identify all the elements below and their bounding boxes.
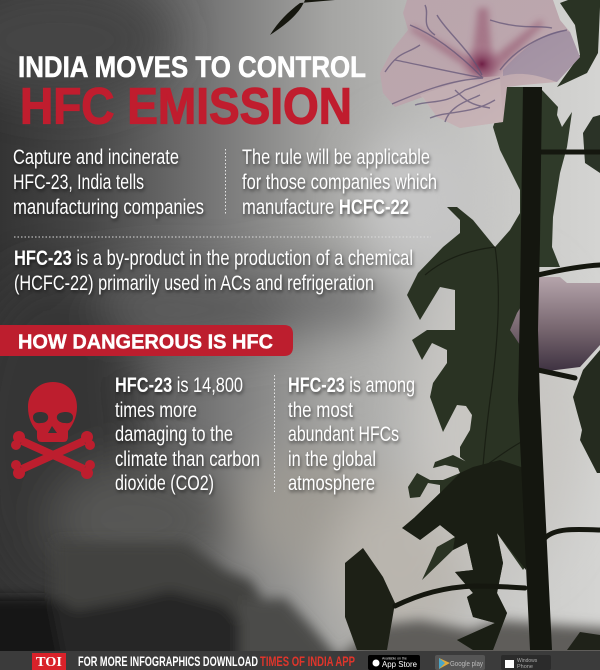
main flower — [380, 0, 580, 128]
App Store badge — [368, 655, 420, 670]
leaf veins — [420, 247, 525, 560]
text block: rule applicability — [242, 146, 437, 219]
text block: damage to the climate: dioxide (CO2) — [115, 472, 214, 495]
Windows Phone badge: Windows — [517, 658, 538, 664]
text block: HFC-23 definition: HFC-23 is a by-product in the production of a chemical — [14, 247, 413, 270]
App Store badge: Available on the — [382, 656, 407, 660]
text block: abundance in atmosphere: abundant HFCs — [288, 423, 399, 446]
TOI logo — [32, 653, 66, 670]
text block: rule applicability: The rule will be applicable — [242, 146, 430, 169]
bottom right leaf — [567, 632, 600, 650]
text block: capture and incinerate: Capture and incinerate — [13, 146, 179, 169]
title — [18, 51, 366, 134]
footer call to action: TIMES OF INDIA APP — [260, 653, 355, 669]
right lower leaf — [573, 350, 600, 473]
text block: damage to the climate — [115, 374, 260, 495]
lower flower — [510, 277, 600, 372]
divider — [274, 375, 276, 492]
text block: HFC-23 definition: (HCFC-22) primarily used in ACs and refrigeration — [14, 272, 374, 295]
text block: abundance in atmosphere: in the global — [288, 448, 376, 471]
dark lower leaf shading — [402, 460, 530, 650]
text block: HFC-23 definition — [14, 247, 413, 295]
lower left leaf — [345, 548, 395, 650]
title: INDIA MOVES TO CONTROL — [18, 51, 366, 84]
plant — [345, 0, 600, 650]
stem — [518, 87, 552, 650]
footer bar — [0, 651, 600, 670]
divider — [224, 149, 226, 215]
text block: capture and incinerate: manufacturing companies — [13, 196, 204, 219]
text block: damage to the climate: times more — [115, 399, 197, 422]
branches — [395, 152, 600, 606]
TOI logo: TOI — [36, 654, 62, 669]
right upper leaf — [583, 115, 600, 173]
App Store badge: App Store — [382, 660, 418, 669]
heading banner: how dangerous is HFC: HOW DANGEROUS IS HFC — [18, 332, 273, 354]
text block: capture and incinerate: HFC-23, India tells — [13, 171, 144, 194]
leaf behind the flower — [557, 0, 600, 87]
heading banner: how dangerous is HFC — [0, 325, 293, 356]
middle torn leaf — [402, 207, 540, 650]
Google Play badge: Google play — [450, 661, 483, 668]
upper leaf — [493, 87, 572, 267]
text block: capture and incinerate — [13, 146, 204, 219]
icon: skull and crossbones — [11, 382, 95, 479]
text block: rule applicability: manufacture HCFC-22 — [242, 196, 409, 219]
Windows Phone badge: Phone — [517, 664, 533, 670]
text block: rule applicability: for those companies which — [242, 171, 437, 194]
dotted separator — [14, 236, 431, 238]
footer call to action: FOR MORE INFOGRAPHICS DOWNLOAD — [78, 653, 258, 669]
text block: damage to the climate: climate than carbon — [115, 448, 260, 471]
text block: damage to the climate: damaging to the — [115, 423, 233, 446]
text block: damage to the climate: HFC-23 is 14,800 — [115, 374, 243, 397]
text block: abundance in atmosphere: the most — [288, 399, 353, 422]
text block: abundance in atmosphere: atmosphere — [288, 472, 375, 495]
Windows Phone badge — [501, 655, 551, 670]
text block: abundance in atmosphere — [288, 374, 415, 495]
small leaf at top — [270, 0, 335, 35]
text block: abundance in atmosphere: HFC-23 is among — [288, 374, 415, 397]
Google Play badge — [435, 655, 485, 670]
title: HFC EMISSION — [20, 78, 352, 134]
